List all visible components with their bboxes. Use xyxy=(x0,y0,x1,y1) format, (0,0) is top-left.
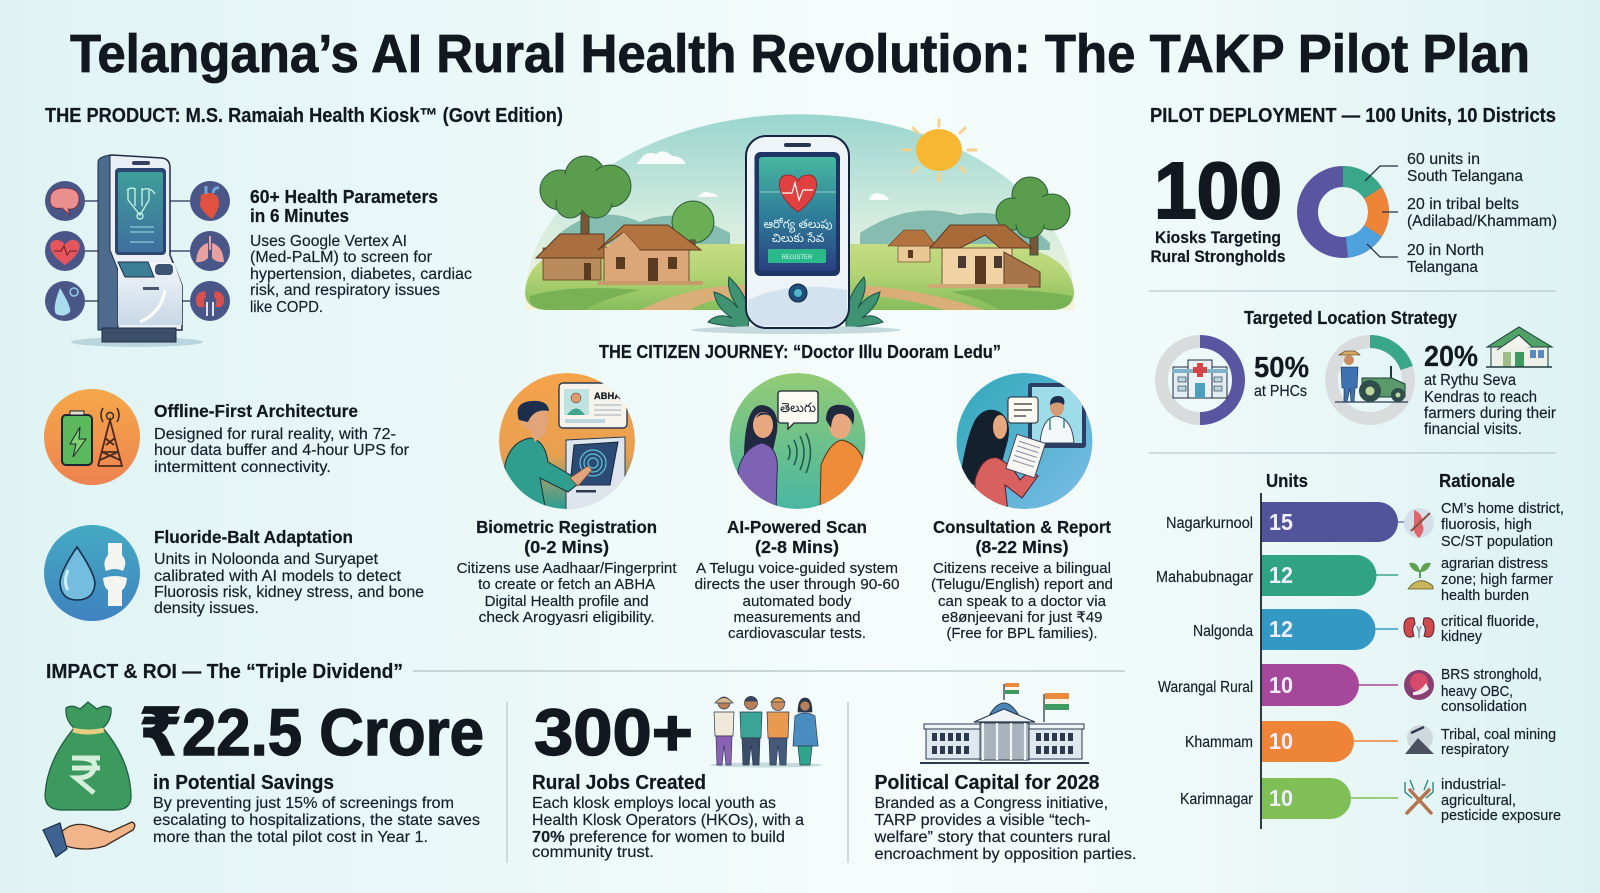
bar: Nalgonda xyxy=(1193,609,1375,650)
rationale: Warangal Rural: consolidation xyxy=(1441,698,1527,715)
stat: 300 jobs: Rural Jobs Created xyxy=(532,772,706,794)
rationale: Karimnagar: agricultural, xyxy=(1441,792,1516,809)
step 2 text: AI-Powered Scan xyxy=(727,517,867,537)
step 1 text: Citizens use Aadhaar/Fingerprint xyxy=(457,561,677,577)
heading: impact: IMPACT & ROI — The “Triple Dividend” xyxy=(46,661,403,683)
step 3 text: (8-22 Mins) xyxy=(976,537,1068,557)
rationale: Nalgonda xyxy=(1404,613,1539,645)
card: ABHA: ABHA xyxy=(594,391,621,402)
title: Telangana’s AI Rural Health Revolution: The TAKP Pilot Plan xyxy=(70,24,1530,84)
step 1: biometric registration xyxy=(457,373,677,626)
rationale: Nagarkurnool xyxy=(1404,500,1564,550)
rationale: Warangal Rural: BRS stronghold, xyxy=(1441,666,1542,683)
stat: 22.5 crore: in Potential Savings xyxy=(153,771,334,794)
icon: money bag xyxy=(45,702,131,810)
heading: the product: THE PRODUCT: M.S. Ramaiah Health Kiosk™ (Govt Edition) xyxy=(45,105,563,127)
text block: 60+ health parameters: 60+ Health Parameters xyxy=(250,187,438,207)
rationale: Mahabubnagar xyxy=(1408,555,1553,604)
far house xyxy=(888,230,936,262)
step 3: consultation and report xyxy=(931,373,1113,642)
rationale: Mahabubnagar: health burden xyxy=(1441,587,1529,604)
rationale: Nalgonda: critical fluoride, xyxy=(1441,613,1539,630)
text block: 60+ health parameters: Uses Google Vertex AI xyxy=(250,233,407,250)
rationale: Warangal Rural xyxy=(1404,666,1542,715)
step 2 text: directs the user through 90-60 xyxy=(694,577,900,593)
house left xyxy=(598,225,703,285)
stat: political capital xyxy=(873,772,1136,863)
icon: kidneys xyxy=(190,281,230,321)
stat: 22.5 crore: By preventing just 15% of screenings from xyxy=(153,795,454,812)
chart column headers: Units xyxy=(1266,471,1308,491)
step 3 text: (Free for BPL families). xyxy=(946,626,1098,642)
stat: 50 percent: at PHCs xyxy=(1254,383,1307,400)
donut legend: 60 units in xyxy=(1407,151,1480,168)
icon: battery and tower xyxy=(44,389,140,485)
phone telugu text xyxy=(763,217,833,248)
bar chart: units by district xyxy=(1156,471,1515,829)
donut chart xyxy=(1308,166,1398,257)
rationale: Karimnagar: industrial- xyxy=(1441,776,1506,793)
bar: Warangal Rural: 10 xyxy=(1269,672,1293,698)
rationale: Nagarkurnool: fluorosis, high xyxy=(1441,516,1532,533)
donut legend: 20 in North xyxy=(1407,242,1484,259)
bar: Mahabubnagar: Mahabubnagar xyxy=(1156,569,1253,586)
stat: 300 jobs: Each klosk employs local youth as xyxy=(532,795,776,812)
bar: Karimnagar xyxy=(1180,778,1351,819)
chart: 50 percent ring with hospital xyxy=(1162,342,1238,418)
chart column headers xyxy=(1266,471,1515,491)
text block: 60+ health parameters xyxy=(250,187,472,316)
step 1 text: Digital Health profile and xyxy=(485,594,649,610)
rationale: Khammam: respiratory xyxy=(1441,741,1509,758)
donut legend xyxy=(1407,151,1557,276)
phone button: REGISTER xyxy=(782,255,813,261)
donut legend: 20 in tribal belts xyxy=(1407,196,1519,213)
stat: 100 kiosks: Kiosks Targeting xyxy=(1155,228,1281,247)
text block: 60+ health parameters: (Med-PaLM) to screen for xyxy=(250,249,432,266)
text block: fluoride-belt: Fluoride-Balt Adaptation xyxy=(154,527,353,547)
text block: 60+ health parameters: risk, and respiratory issues xyxy=(250,282,440,299)
stat: 20 percent: Kendras to reach xyxy=(1424,389,1537,406)
text block: 60+ health parameters: in 6 Minutes xyxy=(250,206,349,226)
rationale: Nalgonda: kidney xyxy=(1441,628,1482,645)
stat: 300 jobs: community trust. xyxy=(532,844,654,861)
rationale: Nagarkurnool: CM’s home district, xyxy=(1441,500,1564,517)
step 3 text: e8ønjeevani for just ₹49 xyxy=(942,610,1102,626)
text block: 60+ health parameters: like COPD. xyxy=(250,299,323,316)
bar: Khammam xyxy=(1185,721,1354,762)
rationale: Karimnagar: pesticide exposure xyxy=(1441,807,1561,824)
text block: fluoride-belt: Units in Noloonda and Suryapet xyxy=(154,551,379,568)
donut legend: Telangana xyxy=(1407,259,1478,276)
donut legend: South Telangana xyxy=(1407,168,1523,185)
step 2 text: (2-8 Mins) xyxy=(755,537,839,557)
text block: offline-first xyxy=(154,401,409,476)
stat: 22.5 crore: escalating to hospitalizations, the state saves xyxy=(153,812,480,829)
stat: 20 percent: farmers during their xyxy=(1424,405,1556,422)
stat: 20 percent: at Rythu Seva xyxy=(1424,372,1516,389)
text block: offline-first: intermittent connectivity. xyxy=(154,459,331,476)
illustration: village landscape with phone xyxy=(525,114,1074,334)
rationale: Karimnagar xyxy=(1405,776,1561,824)
step 3 text: Citizens receive a bilingual xyxy=(933,561,1111,577)
plants xyxy=(708,277,883,328)
heading: citizen journey: THE CITIZEN JOURNEY: “Doctor Illu Dooram Ledu” xyxy=(599,342,1001,362)
icon: drop xyxy=(45,281,85,321)
rationale: Mahabubnagar: agrarian distress xyxy=(1441,555,1548,572)
text block: offline-first: hour data buffer and 4-hour UPS for xyxy=(154,442,409,459)
bar: Nalgonda: Nalgonda xyxy=(1193,623,1253,640)
donut legend: (Adilabad/Khammam) xyxy=(1407,213,1557,230)
text block: fluoride-belt: calibrated with AI models to detect xyxy=(154,568,402,585)
step 3 text: Consultation & Report xyxy=(933,517,1111,537)
illustration: voice guided scan xyxy=(730,373,866,512)
stat: political capital: welfare” story that counters rural xyxy=(873,829,1110,846)
chart column headers: Rationale xyxy=(1439,471,1515,491)
bar: Nagarkurnool: Nagarkurnool xyxy=(1166,515,1253,532)
tablet with doctor xyxy=(1028,383,1086,448)
chat bubble xyxy=(1008,397,1038,423)
step 1 text: Biometric Registration xyxy=(476,517,657,537)
hut left xyxy=(536,234,604,280)
bar: Warangal Rural: Warangal Rural xyxy=(1158,679,1253,696)
step 2 text: A Telugu voice-guided system xyxy=(696,561,898,577)
bar: Warangal Rural xyxy=(1158,664,1359,706)
stat: 100 kiosks: 100 xyxy=(1154,146,1282,235)
icon: rythu seva kendra xyxy=(1486,327,1552,367)
step 1 text: check Arogyasri eligibility. xyxy=(479,610,655,626)
stat: 300 jobs: 70% preference for women to build xyxy=(532,829,785,846)
stat: 22.5 crore xyxy=(139,695,484,846)
rationale: Mahabubnagar: zone; high farmer xyxy=(1441,571,1553,588)
bar: Karimnagar: Karimnagar xyxy=(1180,791,1253,808)
bar: Nagarkurnool: 15 xyxy=(1269,509,1293,535)
trees xyxy=(540,156,1070,255)
icon: open hand xyxy=(43,822,135,857)
step 1 text xyxy=(457,517,677,626)
rationale: Khammam xyxy=(1405,725,1556,758)
stat: 50 percent: 50% xyxy=(1254,352,1309,384)
stat: 20 percent xyxy=(1424,341,1556,438)
bar: Mahabubnagar xyxy=(1156,555,1376,596)
icon: heart on phone xyxy=(779,175,817,212)
stat: 22.5 crore: more than the total pilot cost in Year 1. xyxy=(153,829,428,846)
phone telugu text: ఆరోగ్య తలుపు xyxy=(763,217,833,234)
icon: lungs xyxy=(190,231,230,271)
chart: 20 percent ring with farmer and tractor xyxy=(1332,342,1408,418)
speech bubble: తెలుగు xyxy=(780,402,816,419)
icon: assembly building xyxy=(920,683,1089,763)
bar: Khammam: Khammam xyxy=(1185,734,1253,751)
rationale: Khammam: Tribal, coal mining xyxy=(1441,726,1556,743)
panel: impact and ROI xyxy=(43,661,1136,863)
stat: political capital: Political Capital for 2028 xyxy=(874,772,1100,794)
stat: 300 jobs: 300+ xyxy=(534,695,693,769)
stat: political capital: encroachment by opposition parties. xyxy=(874,846,1136,863)
text block: offline-first: Offline-First Architecture xyxy=(154,401,358,421)
stat: 20 percent: financial visits. xyxy=(1424,421,1522,438)
text block: 60+ health parameters: hypertension, diabetes, cardiac xyxy=(250,266,472,283)
panel: the product xyxy=(44,105,563,621)
illustration: doctor teleconsultation xyxy=(956,373,1092,512)
step 2: AI-powered scan xyxy=(694,373,900,642)
stat: 300 jobs: Health Klosk Operators (HKOs), with a xyxy=(532,812,804,829)
illustration: biometric xyxy=(499,373,635,512)
bar: Khammam: 10 xyxy=(1269,728,1293,754)
stat: 100 kiosks: Rural Strongholds xyxy=(1150,247,1286,266)
step 2 text xyxy=(694,517,900,642)
bar: Nagarkurnool xyxy=(1166,502,1398,542)
stat: political capital: Branded as a Congress initiative, xyxy=(874,795,1108,812)
bar: Mahabubnagar: 12 xyxy=(1269,562,1293,588)
step 2 text: measurements and xyxy=(734,610,860,626)
stat: 22.5 crore: ₹22.5 Crore xyxy=(139,695,484,769)
bar: Nalgonda: 12 xyxy=(1269,616,1293,642)
step 3 text: can speak to a doctor via xyxy=(938,594,1107,610)
panel: pilot deployment xyxy=(1149,105,1564,829)
icon: rural workers xyxy=(710,696,822,768)
text block: fluoride-belt: Fluorosis risk, kidney stress, and bone xyxy=(154,584,424,601)
text block: offline-first: Designed for rural reality, with 72- xyxy=(154,426,396,443)
icon: water drop and bone xyxy=(44,525,140,621)
report sheet xyxy=(1006,434,1046,478)
illustration: kiosk with health icons xyxy=(45,155,230,347)
step 1 text: to create or fetch an ABHA xyxy=(478,577,655,593)
stat: political capital: TARP provides a visible “tech- xyxy=(874,812,1090,829)
phone button xyxy=(768,249,826,263)
step 2 text: automated body xyxy=(742,594,852,610)
icon: brain xyxy=(45,181,85,221)
stat: 300 jobs xyxy=(532,695,804,861)
phone telugu text: చిలుకు సేవ xyxy=(772,232,825,248)
step 1 text: (0-2 Mins) xyxy=(524,537,609,557)
stat: 50 percent xyxy=(1254,352,1309,400)
illustration: phone xyxy=(746,136,849,328)
rationale: Nagarkurnool: SC/ST population xyxy=(1441,533,1553,550)
icon: sun xyxy=(903,120,976,181)
rationale: Warangal Rural: heavy OBC, xyxy=(1441,683,1513,700)
icon: heart organ xyxy=(190,181,230,221)
text block: fluoride-belt xyxy=(154,527,424,617)
heading: location strategy: Targeted Location Strategy xyxy=(1244,308,1457,328)
house right xyxy=(928,225,1040,288)
stat: 20 percent: 20% xyxy=(1424,341,1478,373)
heading: pilot deployment: PILOT DEPLOYMENT — 100 Units, 10 Districts xyxy=(1150,105,1556,127)
step 3 text: (Telugu/English) report and xyxy=(931,577,1113,593)
text block: fluoride-belt: density issues. xyxy=(154,600,259,617)
icon: heartbeat xyxy=(45,231,85,271)
step 2 text: cardiovascular tests. xyxy=(728,626,866,642)
step 3 text xyxy=(931,517,1113,642)
bar: Karimnagar: 10 xyxy=(1269,785,1293,811)
